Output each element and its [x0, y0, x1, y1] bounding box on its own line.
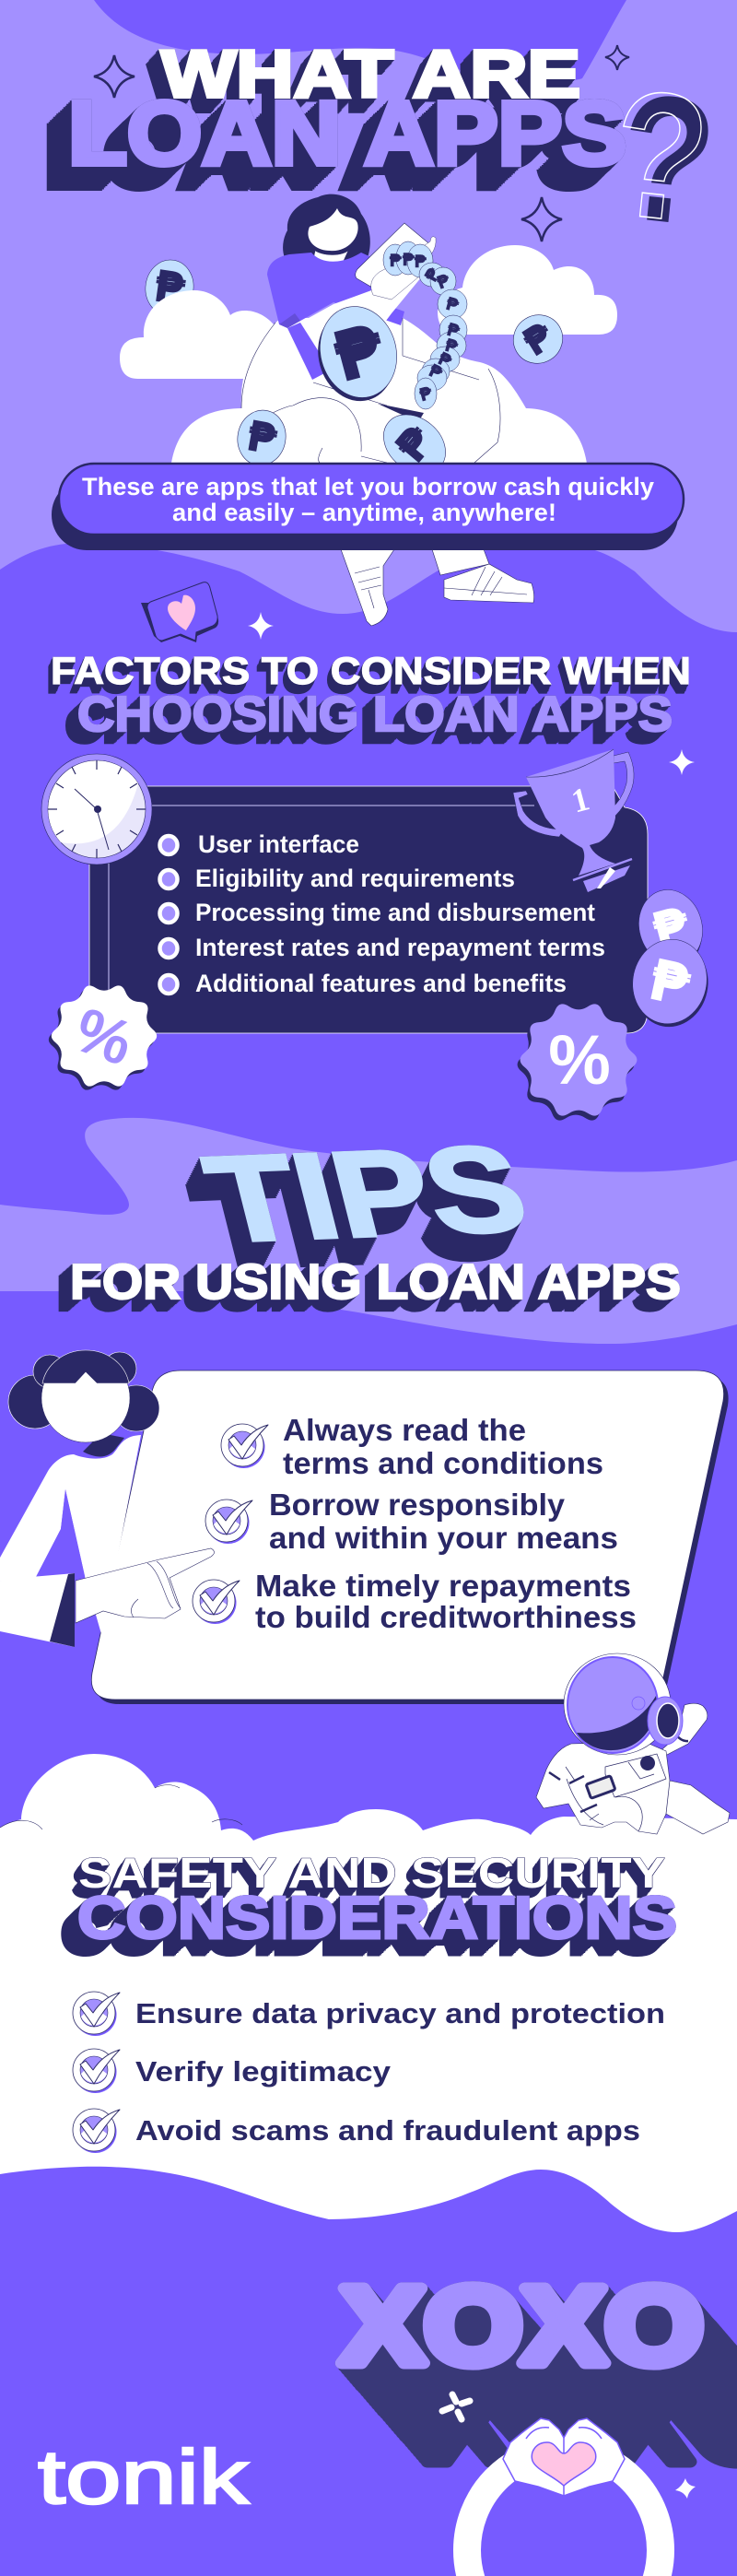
tip texts: Always read the — [283, 1413, 526, 1447]
safety list — [73, 1992, 665, 2153]
body — [0, 1435, 141, 1641]
pill text: These are apps that let you borrow cash quickly — [82, 473, 654, 500]
helmet shell — [564, 1653, 671, 1755]
panel: tips card — [91, 1370, 729, 1704]
coin bottom left: ₱ — [243, 413, 280, 464]
list text: User interface — [198, 830, 359, 858]
hand — [371, 237, 436, 300]
coin stream: ₱ — [443, 335, 461, 359]
coin bottom centre: ₱ — [386, 417, 443, 472]
badge lilac percent — [518, 1004, 637, 1121]
cloud contours — [0, 1785, 242, 1829]
coin stream: ₱ — [402, 250, 415, 270]
coin bottom left — [233, 406, 290, 469]
neck shadow — [83, 1433, 124, 1456]
woman figure — [241, 194, 500, 463]
coin stream — [383, 241, 467, 409]
list text: Interest rates and repayment terms — [195, 934, 605, 961]
visor — [567, 1657, 658, 1753]
title: loan apps: LOAN APPS — [68, 83, 626, 183]
visor shade — [577, 1696, 657, 1750]
coin: large centre — [308, 298, 407, 410]
coin lilac back: ₱ — [647, 896, 696, 961]
tip texts: Make timely repayments — [255, 1569, 631, 1603]
safety texts — [135, 1997, 665, 2147]
astronaut — [536, 1653, 730, 1834]
icon: trophy — [513, 749, 634, 892]
cloud left — [120, 290, 286, 379]
hair buns — [8, 1352, 159, 1431]
tip texts: Borrow responsibly — [269, 1488, 566, 1522]
background: white section with clouds — [0, 1754, 737, 2232]
cloud right — [438, 245, 617, 335]
coin stream: ₱ — [435, 348, 455, 372]
icon: clock — [41, 754, 152, 865]
badge lilac percent: % — [548, 1021, 611, 1100]
safety texts: Verify legitimacy — [135, 2055, 392, 2088]
hair — [283, 194, 370, 271]
badge white percent — [49, 985, 157, 1090]
background: tips lilac wave — [0, 1118, 737, 1344]
title: what are: WHAT ARE — [161, 38, 580, 112]
background: top purple wave — [94, 0, 626, 80]
suit details — [566, 1754, 670, 1831]
coin stream: ₱ — [417, 382, 435, 406]
heart hands — [467, 2418, 661, 2576]
ring arms — [467, 2451, 661, 2576]
icon: sparkle diamond — [675, 2478, 696, 2499]
tablet — [356, 223, 432, 295]
safety texts: Avoid scams and fraudulent apps — [135, 2114, 640, 2147]
icon: trophy: 1 — [567, 780, 593, 820]
forearm — [300, 276, 422, 369]
left shoe and leg — [341, 549, 394, 626]
coin stream: ₱ — [434, 270, 453, 294]
lower arm sleeve — [287, 323, 328, 380]
intro pill — [52, 464, 684, 550]
coin right: ₱ — [517, 315, 561, 365]
coin lilac front — [625, 933, 717, 1034]
heading: for using loan apps: FOR USING LOAN APPS — [70, 1254, 681, 1310]
woman pointing — [0, 1350, 214, 1647]
icon: question mark: ? — [603, 52, 717, 261]
list text: Eligibility and requirements — [195, 865, 515, 892]
legs outline — [241, 318, 500, 463]
icon: sparkle top right — [605, 45, 629, 70]
icon: sparkle left — [94, 55, 135, 98]
tip texts: terms and conditions — [283, 1446, 603, 1480]
tip texts — [255, 1413, 637, 1634]
panel: factors list — [89, 786, 648, 1033]
intro pill: and easily – anytime, anywhere! — [172, 499, 556, 526]
armpit gap — [35, 1489, 85, 1579]
coin lilac back — [630, 883, 711, 975]
heading: considerations: CONSIDERATIONS — [77, 1884, 677, 1951]
safety texts: Ensure data privacy and protection — [135, 1997, 665, 2029]
list text: Additional features and benefits — [195, 970, 567, 997]
face — [308, 208, 358, 251]
coin stream: ₱ — [445, 320, 462, 343]
icon: heart bubble — [141, 582, 218, 642]
pill face — [59, 464, 684, 535]
head — [41, 1354, 130, 1442]
heading: xoxo: XOXO — [341, 2265, 703, 2387]
list text: Processing time and disbursement — [195, 899, 595, 926]
coin behind left cloud: ₱ — [151, 261, 188, 314]
coin: large centre: ₱ — [326, 310, 392, 396]
shirt — [267, 253, 404, 328]
raised arm — [657, 1703, 708, 1757]
fringe — [42, 1350, 129, 1383]
icon: sparkle trophy — [669, 749, 695, 775]
heading: safety and security: SAFETY AND SECURITY — [78, 1849, 665, 1897]
coin stream: ₱ — [414, 252, 427, 272]
hands — [503, 2418, 625, 2496]
heading: choosing loan apps: CHOOSING LOAN APPS — [77, 687, 673, 742]
icon: sparkle lower right — [521, 197, 562, 241]
list text — [195, 830, 605, 997]
skirt wedge — [378, 404, 424, 422]
check icons — [73, 1992, 120, 2036]
background: hero lilac band — [0, 0, 737, 632]
coin stream: ₱ — [389, 251, 402, 271]
bullets — [160, 836, 177, 994]
heading: factors: FACTORS TO CONSIDER WHEN — [51, 649, 691, 692]
pill shadow — [52, 479, 678, 550]
coin stream: ₱ — [426, 360, 446, 384]
coin lilac front: ₱ — [644, 947, 696, 1019]
arm and hand — [76, 1548, 214, 1623]
suit body — [536, 1742, 730, 1834]
earpiece — [648, 1697, 683, 1745]
icon: sparkle petals — [442, 2394, 470, 2419]
cloud large — [170, 318, 588, 470]
coin stream: ₱ — [421, 265, 445, 286]
icon: question mark: ? — [611, 55, 724, 265]
tip texts: and within your means — [269, 1521, 618, 1555]
phone — [586, 1776, 615, 1798]
coin stream: ₱ — [444, 294, 462, 317]
heading: tips: TIPS — [193, 1121, 539, 1267]
coin right — [504, 306, 572, 372]
heart — [532, 2442, 596, 2486]
right shoe and leg — [432, 549, 534, 603]
collar — [313, 251, 348, 265]
badge white percent: % — [65, 994, 142, 1079]
icon: sparkle white — [248, 612, 274, 640]
sleeve — [0, 1573, 75, 1647]
coin behind left cloud — [142, 257, 197, 318]
logo: tonik: tonik — [38, 2434, 250, 2520]
coin bottom centre — [372, 403, 457, 486]
tip texts: to build creditworthiness — [255, 1600, 637, 1634]
check icons — [221, 1424, 268, 1468]
